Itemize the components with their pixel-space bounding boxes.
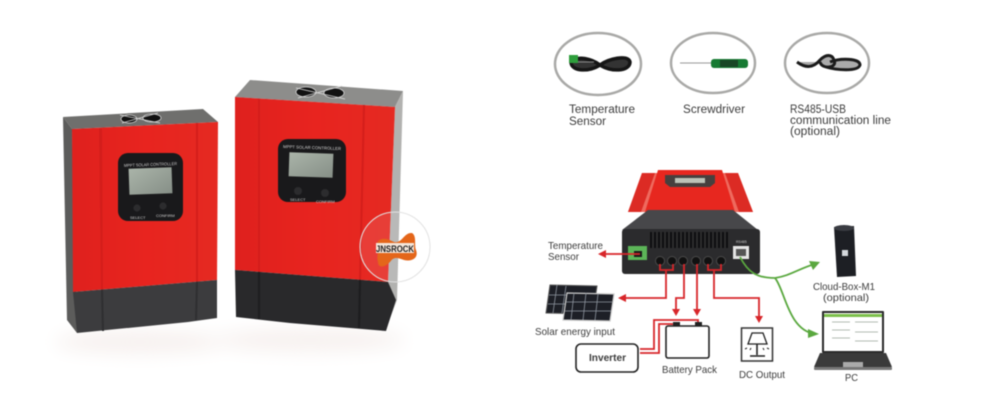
label: DC Output — [739, 369, 785, 381]
icon: laptop PC — [814, 311, 892, 384]
watermark stamp: JNSROCK — [376, 244, 414, 254]
accessory: RS485-USB line: communication line — [790, 115, 891, 127]
icon: top vent logo — [296, 86, 345, 99]
accessory: screwdriver — [671, 33, 755, 116]
display panel: MPPT SOLAR CONTROLLER — [124, 161, 177, 168]
green data arrows — [740, 257, 820, 338]
icon: Cloud-Box-M1: (optional) — [823, 292, 869, 304]
icon: solar panels — [535, 285, 615, 338]
display panel: SELECT — [290, 197, 306, 202]
icon: battery pack — [662, 322, 718, 376]
label: Cloud-Box-M1 — [813, 281, 875, 293]
display panel: MPPT SOLAR CONTROLLER — [283, 144, 341, 151]
terminals — [656, 256, 726, 266]
display panel: SELECT — [130, 215, 146, 220]
label: Solar energy input — [535, 326, 615, 338]
product: large solar controller — [235, 80, 403, 331]
display panel — [278, 139, 346, 204]
display panel: CONFIRM — [316, 199, 335, 204]
temperature terminal — [628, 246, 647, 260]
label: Temperature — [569, 104, 635, 116]
label: PC — [845, 372, 858, 384]
icon: Cloud-Box-M1 — [813, 225, 875, 304]
display panel — [118, 153, 183, 221]
vent slots — [650, 232, 728, 248]
arrowheads — [598, 250, 763, 323]
accessory: temperature sensor — [555, 33, 641, 128]
controller rear view — [622, 170, 760, 274]
RJ45 port — [733, 246, 749, 259]
inverter box — [576, 344, 638, 372]
temperature sensor label: Temperature — [548, 240, 603, 252]
label: RS485-USB — [790, 104, 846, 116]
red wiring arrows — [598, 250, 763, 353]
watermark stamp — [360, 212, 430, 282]
accessory: temperature sensor: Sensor — [569, 116, 606, 128]
icon: DC output lamp — [739, 328, 785, 381]
controller rear view: RS485 — [736, 240, 747, 244]
label: Screwdriver — [683, 104, 745, 116]
accessory: RS485-USB line: (optional) — [790, 126, 840, 138]
product: small solar controller — [63, 109, 218, 333]
label: Battery Pack — [662, 364, 718, 376]
temperature sensor label: Sensor — [548, 251, 579, 263]
display panel: CONFIRM — [156, 213, 175, 218]
floor shadow — [55, 329, 405, 353]
icon: top vent logo — [120, 113, 161, 123]
temperature sensor label — [548, 240, 603, 263]
inverter box: Inverter — [589, 352, 626, 364]
accessory: RS485-USB line — [785, 33, 891, 138]
